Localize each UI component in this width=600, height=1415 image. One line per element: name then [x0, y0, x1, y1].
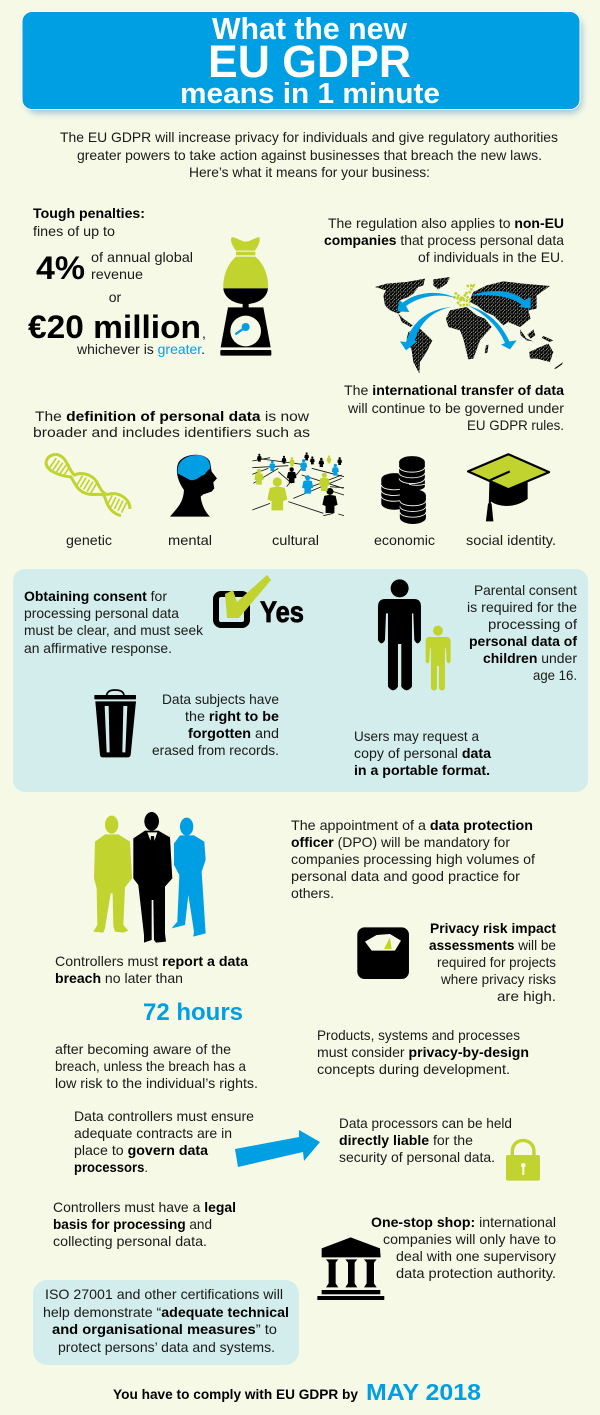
data protection officer text: others.	[291, 885, 334, 901]
breach continuation text: breach, unless the breach has a	[55, 1058, 246, 1074]
privacy risk text: where privacy risks	[440, 971, 556, 987]
icon: coin stacks	[381, 456, 426, 524]
icon: bank building	[317, 1237, 384, 1300]
liability text	[339, 1115, 512, 1165]
contracts text: processors.	[74, 1159, 148, 1175]
penalties text: Tough penalties:	[33, 205, 145, 221]
legal basis text: Controllers must have a legal	[53, 1199, 236, 1215]
penalties text: revenue	[91, 266, 143, 282]
icon: padlock	[506, 1140, 540, 1181]
intro text: greater powers to take action against businesses that breach the new laws.	[77, 147, 542, 163]
legal basis text: collecting personal data.	[53, 1233, 207, 1249]
contracts text: Data controllers must ensure	[74, 1108, 254, 1124]
icon: weighing scale	[357, 927, 409, 979]
parental consent text: Parental consent	[474, 582, 577, 598]
title banner	[22, 11, 582, 113]
liability text: directly liable for the	[339, 1132, 473, 1148]
penalties text: of annual global	[91, 249, 193, 265]
panel: ISO certification callout: ISO 27001 and other certifications will	[45, 1286, 283, 1302]
privacy by design text: Products, systems and processes	[317, 1027, 520, 1043]
non-EU text: companies that process personal data	[324, 232, 564, 248]
privacy by design text: concepts during development.	[317, 1061, 510, 1077]
parental consent text: is required for the	[467, 599, 577, 615]
contracts text: adequate contracts are in	[74, 1125, 232, 1141]
privacy by design text	[317, 1027, 529, 1077]
penalties text: whichever is greater.	[76, 341, 205, 357]
penalties text: €20 million	[28, 309, 201, 345]
consent text: an affirmative response.	[24, 640, 172, 656]
intro text	[60, 129, 558, 180]
consent text: must be clear, and must seek	[24, 622, 204, 638]
privacy risk text: assessments will be	[429, 937, 556, 953]
legal basis text: basis for processing and	[53, 1216, 212, 1232]
penalties text: ,	[202, 325, 206, 341]
privacy risk text: are high.	[497, 988, 556, 1004]
title banner: EU GDPR	[208, 36, 411, 87]
data portability text	[354, 728, 491, 778]
intro text: Here’s what it means for your business:	[189, 164, 430, 180]
title banner: What the new	[212, 11, 408, 46]
privacy by design text: must consider privacy-by-design	[317, 1044, 529, 1060]
one-stop shop text	[371, 1214, 556, 1281]
liability text: security of personal data.	[339, 1149, 495, 1165]
breach continuation text: low risk to the individual’s rights.	[55, 1075, 258, 1091]
icon labels: cultural	[272, 532, 319, 548]
privacy risk text: required for projects	[437, 954, 556, 970]
icon: graduation cap	[468, 454, 549, 521]
icon labels: mental	[168, 532, 212, 548]
international transfer text	[344, 382, 564, 433]
icon labels	[66, 532, 556, 548]
world map with arrows	[375, 277, 563, 374]
data protection officer text: personal data and good practice for	[291, 868, 520, 884]
panel: ISO certification callout	[33, 1280, 299, 1365]
72 hours figure: 72 hours	[143, 999, 243, 1026]
parental consent text: personal data of	[469, 633, 577, 649]
data breach text	[55, 953, 248, 986]
penalties text: 4%	[36, 250, 85, 286]
parental consent text: processing of	[488, 616, 577, 632]
breach continuation text	[55, 1041, 258, 1091]
right to be forgotten text: forgotten and	[188, 725, 279, 741]
non-EU text: The regulation also applies to non-EU	[328, 215, 564, 231]
data protection officer text: The appointment of a data protection	[291, 817, 533, 833]
consent text: processing personal data	[24, 605, 179, 621]
one-stop shop text: deal with one supervisory	[396, 1248, 556, 1264]
parental consent text	[467, 582, 577, 683]
penalties text: fines of up to	[33, 223, 115, 239]
one-stop shop text: One-stop shop: international	[371, 1214, 556, 1230]
personal data definition text: broader and includes identifiers such as	[33, 424, 310, 440]
icon labels: genetic	[66, 532, 112, 548]
icon labels: economic	[374, 532, 435, 548]
right to be forgotten text: erased from records.	[152, 742, 279, 758]
non-EU text	[324, 215, 564, 265]
privacy risk text: Privacy risk impact	[430, 920, 556, 936]
consent text: Obtaining consent for	[24, 588, 167, 604]
data protection officer text: officer (DPO) will be mandatory for	[291, 834, 510, 850]
data breach text: breach no later than	[55, 970, 183, 986]
right to be forgotten text	[152, 691, 279, 758]
data portability text: in a portable format.	[354, 762, 490, 778]
footer deadline: MAY 2018	[366, 1379, 481, 1405]
contracts text: place to govern data	[74, 1142, 208, 1158]
non-EU text: of individuals in the EU.	[418, 249, 564, 265]
consent text	[24, 588, 204, 656]
data breach text: Controllers must report a data	[55, 953, 248, 969]
icon: adult and child	[378, 579, 451, 690]
international transfer text: will continue to be governed under	[347, 400, 564, 416]
one-stop shop text: data protection authority.	[396, 1265, 556, 1281]
one-stop shop text: companies will only have to	[383, 1231, 556, 1247]
international transfer text: The international transfer of data	[344, 382, 564, 398]
personal data definition text	[33, 408, 310, 440]
panel: ISO certification callout: help demonstrate “adequate technical	[43, 1304, 289, 1320]
penalties text: or	[109, 289, 122, 305]
icon: three business people	[93, 812, 206, 943]
liability text: Data processors can be held	[339, 1115, 512, 1131]
intro text: The EU GDPR will increase privacy for individuals and give regulatory authorities	[60, 129, 558, 145]
icon: head with brain	[170, 455, 217, 517]
title banner: means in 1 minute	[180, 78, 440, 110]
data portability text: Users may request a	[354, 728, 479, 744]
data protection officer text	[291, 817, 535, 901]
parental consent text: age 16.	[533, 667, 577, 683]
data portability text: copy of personal data	[354, 745, 491, 761]
parental consent text: children under	[483, 650, 577, 666]
penalties text	[28, 205, 206, 357]
footer deadline: You have to comply with EU GDPR by	[113, 1386, 358, 1402]
data protection officer text: companies processing high volumes of	[291, 851, 535, 867]
right to be forgotten text: the right to be	[185, 708, 279, 724]
arrow	[235, 1130, 320, 1167]
international transfer text: EU GDPR rules.	[467, 417, 564, 433]
privacy risk text	[429, 920, 556, 1004]
panel: ISO certification callout: protect persons’ data and systems.	[58, 1339, 275, 1355]
contracts text	[74, 1108, 254, 1175]
panel: rights and consent	[13, 569, 588, 792]
icon: cultural network of people	[252, 452, 344, 516]
icon: trash can	[94, 690, 136, 757]
footer deadline	[113, 1379, 481, 1405]
legal basis text	[53, 1199, 236, 1249]
panel: ISO certification callout: and organisational measures ” to	[52, 1321, 277, 1337]
right to be forgotten text: Data subjects have	[162, 691, 279, 707]
breach continuation text: after becoming aware of the	[55, 1041, 231, 1057]
icon labels: social identity.	[466, 532, 556, 548]
icon: DNA helix	[46, 454, 130, 516]
icon: money bag on scale	[220, 237, 271, 356]
icon: yes checkbox	[216, 575, 304, 629]
personal data definition text: The definition of personal data is now	[35, 408, 310, 424]
icon: yes checkbox: Yes	[260, 596, 304, 629]
